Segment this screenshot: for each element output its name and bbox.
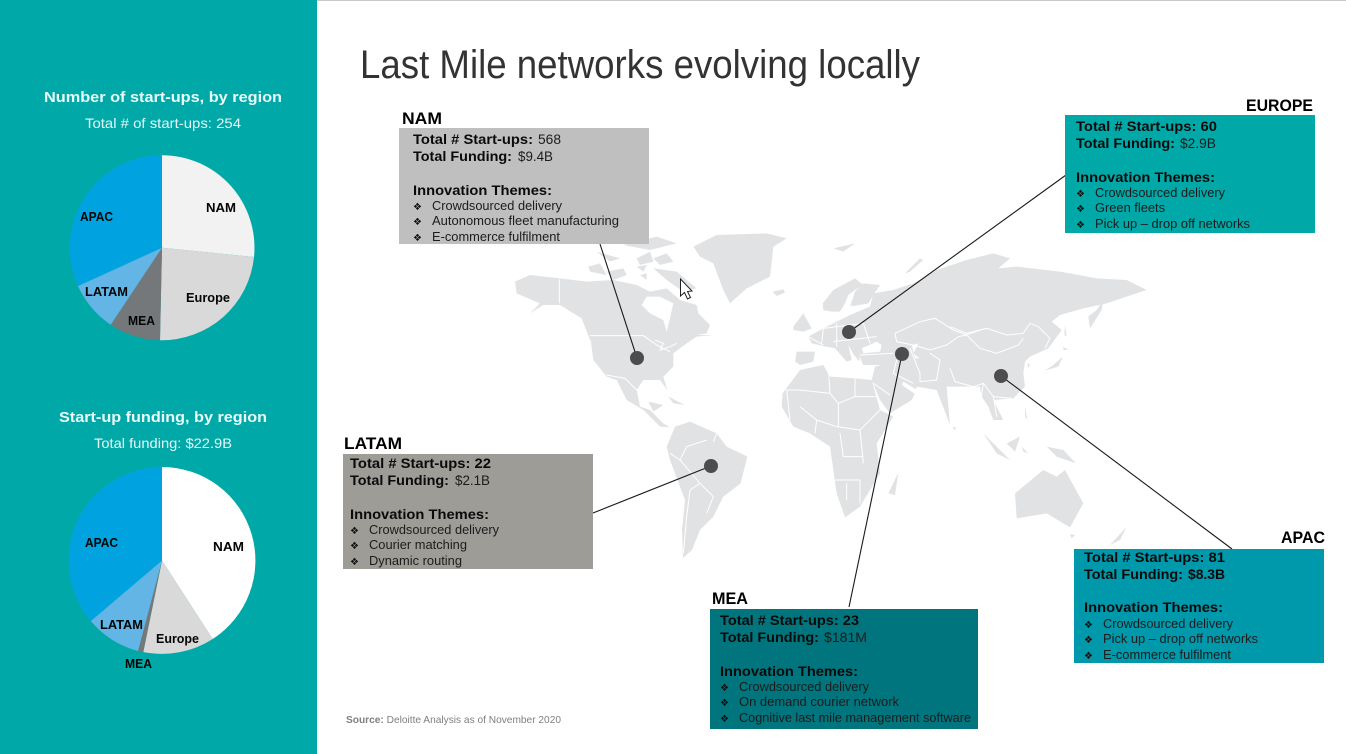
panel: LATAM: LATAM [344,434,402,453]
Australia [1015,470,1083,527]
Arctic Russia islands [833,243,923,273]
panel: NAM: ❖ [413,202,422,213]
panel: LATAM: Dynamic routing [369,554,462,568]
panel: Europe: ❖ [1076,220,1085,231]
map marker: MEA [895,347,909,361]
panel: NAM: ❖ [413,233,422,244]
icon: mouse cursor [680,279,692,299]
panel: MEA: Total # Start-ups: 23 [720,613,860,628]
panel: NAM: Total # Start-ups: [413,132,533,147]
heading: start-up funding: Start-up funding, by region [59,409,267,426]
panel: MEA: $181M [824,629,867,645]
panel: left summary sidebar [0,0,317,754]
panel: APAC: E-commerce fulfilment [1103,648,1232,662]
Caribbean [648,397,685,412]
panel: NAM: NAM [402,109,442,128]
panel: NAM: Total Funding: [413,149,512,164]
map marker: LATAM [704,459,718,473]
panel: Europe: Green fleets [1095,201,1165,215]
panel: MEA: Cognitive last mile management software [739,711,971,725]
pie chart: start-ups by region: LATAM [85,285,128,299]
panel: MEA: ❖ [720,698,729,709]
heading: number of start-ups: Number of start-ups, by region [44,89,282,106]
map marker: NAM [630,351,644,365]
Sri Lanka and Taiwan [953,363,1030,431]
panel: APAC: ❖ [1084,651,1093,662]
pie chart: funding by region: NAM [213,540,244,554]
Iberia [795,352,815,365]
panel: NAM: ❖ [413,217,422,228]
panel: LATAM: ❖ [350,541,359,552]
USA, Mexico and Central America [590,335,713,427]
pie chart: funding by region: Europe [156,632,199,646]
panel: APAC: Total Funding: [1084,567,1183,582]
Arctic islands [588,237,697,292]
pie chart: start-ups by region: APAC [80,210,113,224]
map marker: Europe [842,325,856,339]
panel: NAM [399,109,649,244]
panel: LATAM: ❖ [350,526,359,537]
British Isles [793,313,812,332]
panel: APAC: Pick up – drop off networks [1103,632,1258,646]
panel: LATAM: Crowdsourced delivery [369,523,500,537]
panel: APAC [1074,528,1325,663]
Alaska and Canada [515,275,710,356]
Baltic Sea and Persian Gulf [845,305,920,395]
panel: APAC: ❖ [1084,620,1093,631]
pie chart: start-ups by region: MEA [128,314,155,328]
Hudson Bay [642,297,673,332]
panel: Europe: EUROPE [1246,96,1313,115]
panel: LATAM: Courier matching [369,538,467,552]
panel: Europe: Crowdsourced delivery [1095,186,1226,200]
panel: LATAM: $2.1B [455,472,490,488]
panel: MEA: Crowdsourced delivery [739,680,870,694]
panel: MEA [710,589,978,729]
connector line: LATAM [593,466,711,513]
panel: APAC: APAC [1281,528,1325,547]
panel: MEA: On demand courier network [739,695,900,709]
panel: Europe [1065,96,1315,233]
panel: Europe: ❖ [1076,204,1085,215]
Eurasia [808,253,1147,425]
panel: NAM: $9.4B [518,148,553,164]
panel: MEA: MEA [712,589,748,608]
connector line: NAM [600,244,637,358]
panel: LATAM: Total # Start-ups: 22 [350,456,491,471]
Kamchatka, Sakhalin and Japan [1045,300,1103,371]
pie chart: start-ups by region: NAM [206,201,236,215]
panel: MEA: Innovation Themes: [720,664,858,679]
Indonesia [983,407,1028,460]
panel: Europe: Total Funding: [1076,136,1175,151]
New Zealand [1070,527,1127,545]
source note: Source: Deloitte Analysis as of November 2020 [346,714,561,726]
world map [515,233,1147,558]
panel: Europe: Pick up – drop off networks [1095,217,1250,231]
title: Last Mile networks evolving locally [360,43,920,87]
panel: NAM: Autonomous fleet manufacturing [432,214,619,228]
pie chart: start-ups by region [70,155,254,340]
pie chart: funding by region: LATAM [100,618,143,632]
Africa [782,365,893,517]
panel: LATAM [343,434,593,569]
panel: Europe: ❖ [1076,189,1085,200]
New Guinea [1047,447,1076,463]
connector line: MEA [849,354,902,607]
panel: Europe: Total # Start-ups: 60 [1076,119,1217,134]
pie chart: funding by region [69,467,255,671]
South America [667,422,747,558]
connector line: Europe [849,175,1066,332]
panel: APAC: ❖ [1084,635,1093,646]
connector line: APAC [1001,376,1232,549]
panel: NAM: E-commerce fulfilment [432,230,561,244]
panel: Europe: $2.9B [1180,135,1216,151]
panel: APAC: Crowdsourced delivery [1103,617,1234,631]
panel: NAM: Innovation Themes: [413,183,552,198]
Finland [850,283,880,307]
panel: APAC: Total # Start-ups: 81 [1084,550,1226,565]
pie chart: start-ups by region: Europe [186,291,230,305]
panel: LATAM: Total Funding: [350,473,449,488]
pie chart: funding by region: MEA [125,657,152,671]
Norway and Sweden [823,278,863,312]
panel: Europe: Innovation Themes: [1076,170,1215,185]
map marker: APAC [994,369,1008,383]
Greenland [693,233,787,303]
Iceland [773,289,785,296]
text: total start-ups: Total # of start-ups: 254 [85,115,241,131]
panel: LATAM: Innovation Themes: [350,507,489,522]
text: total funding: Total funding: $22.9B [94,435,232,451]
panel: NAM: 568 [538,131,561,147]
panel: APAC: $8.3B [1188,567,1225,582]
pie chart: funding by region: APAC [85,536,118,550]
panel: MEA: ❖ [720,714,729,725]
panel: NAM: Crowdsourced delivery [432,199,563,213]
Madagascar [888,473,898,495]
Black Sea and Caspian Sea [862,342,920,358]
panel: MEA: ❖ [720,683,729,694]
panel: LATAM: ❖ [350,557,359,568]
panel: MEA: Total Funding: [720,630,819,645]
panel: APAC: Innovation Themes: [1084,600,1223,615]
